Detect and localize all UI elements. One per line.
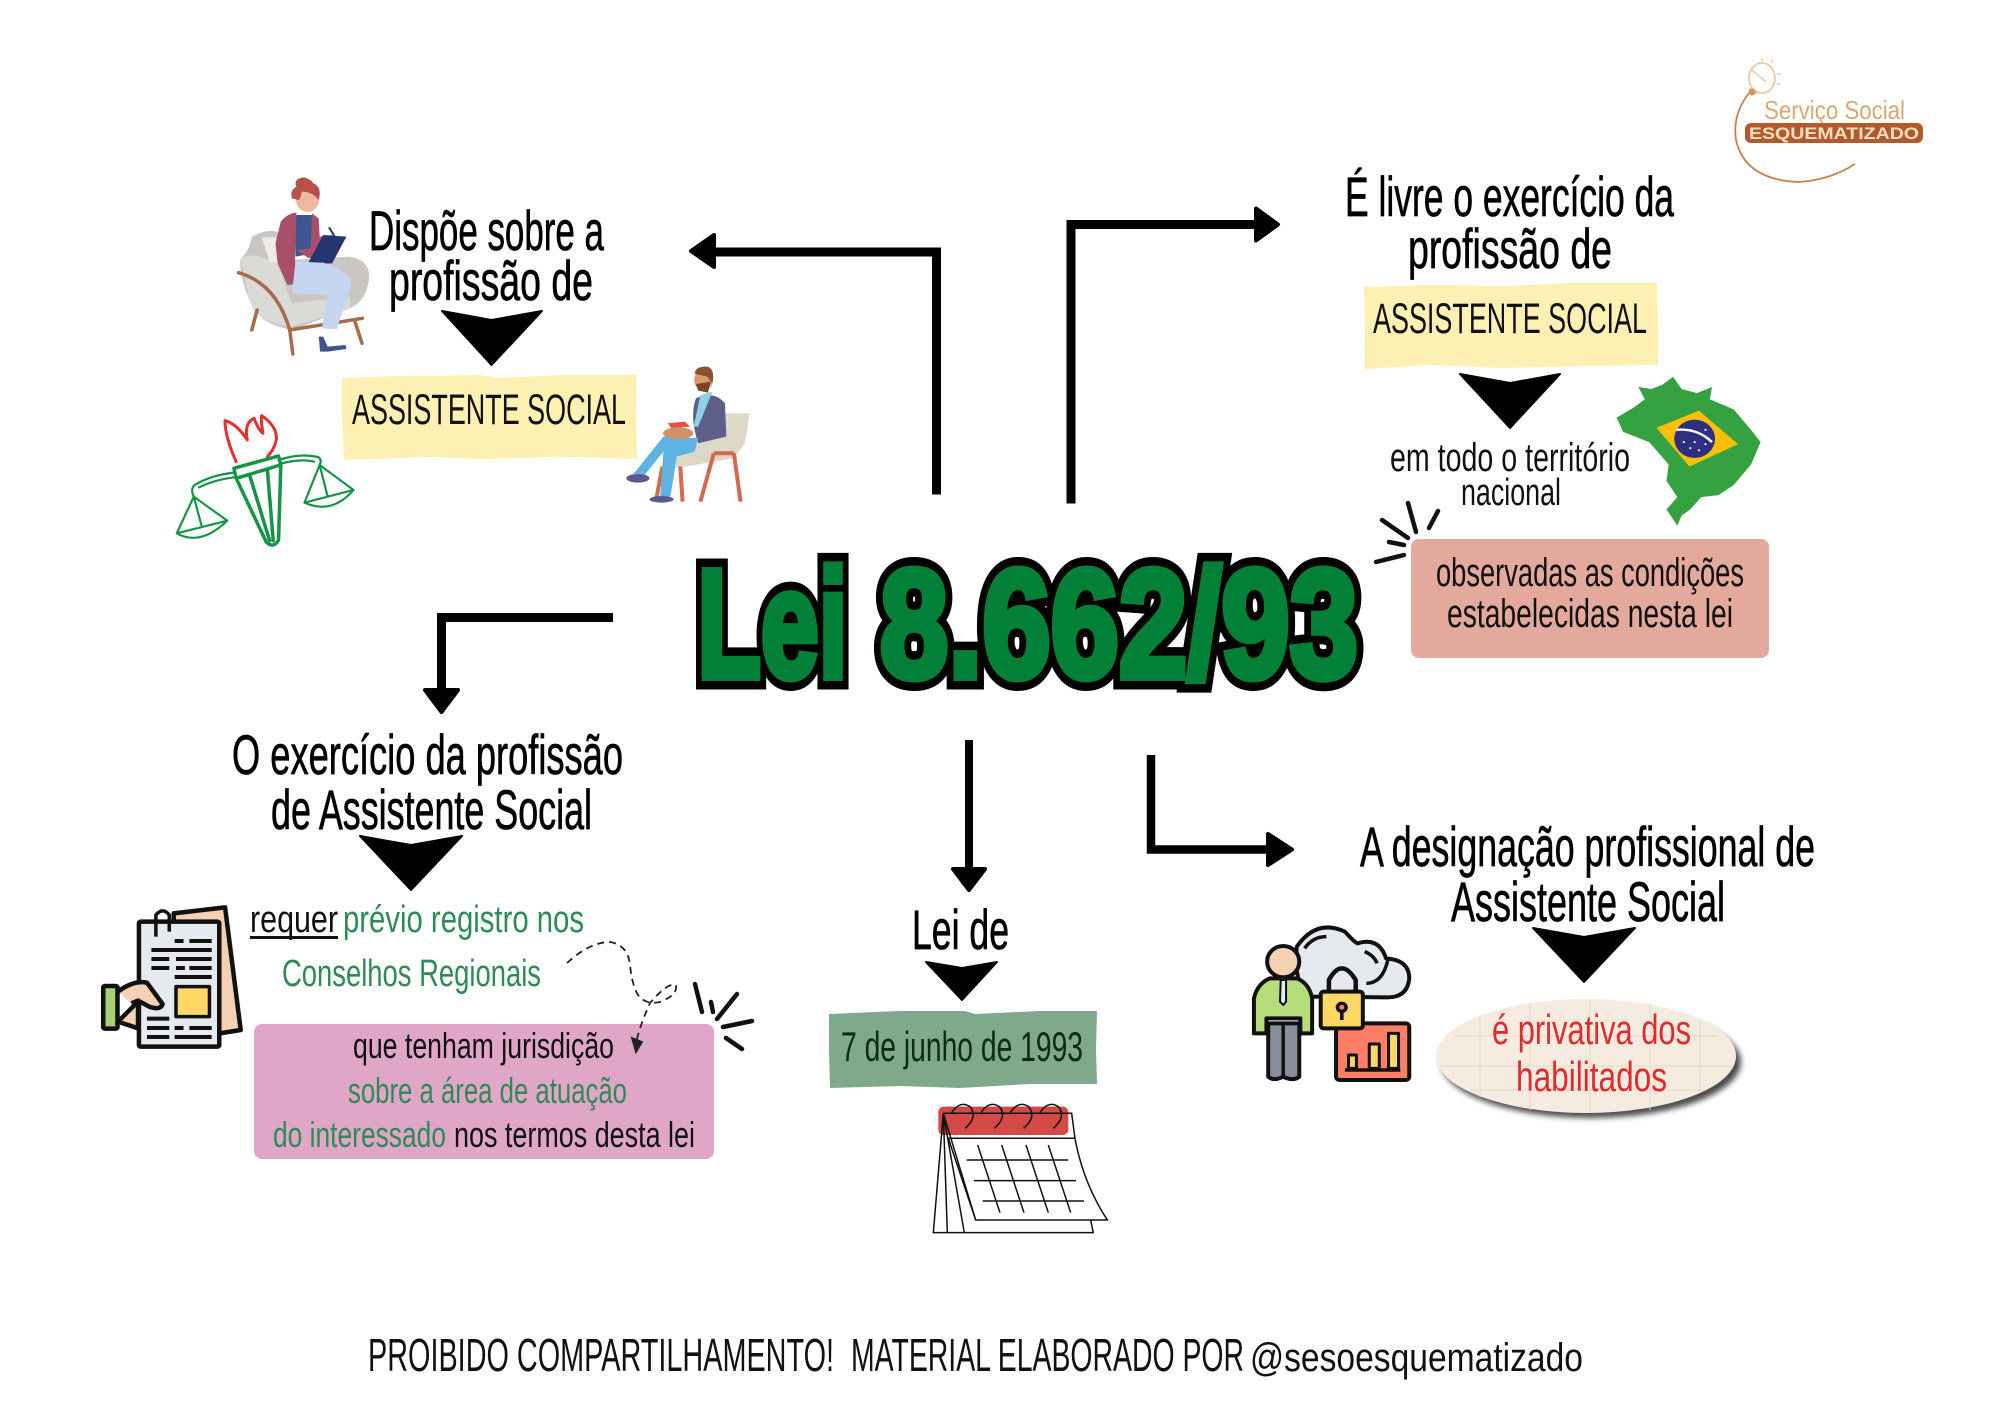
label box: ASSISTENTE SOCIAL: ASSISTENTE SOCIAL [352, 386, 626, 434]
callout: que tenham jurisdição: nos termos desta lei [454, 1114, 695, 1155]
title: Lei 8.662/93: Lei [698, 538, 848, 710]
arrow: dashed looping arrow [567, 942, 676, 1052]
icon: torch and scales of justice [177, 416, 354, 545]
callout: observadas as condições: estabelecidas nesta lei [1447, 592, 1733, 636]
title: Lei 8.662/93 [698, 538, 1358, 710]
arrow: down triangle [1533, 928, 1635, 982]
arrow: down triangle [926, 962, 997, 1000]
callout: é privativa dos habilitados: é privativa dos [1492, 1006, 1691, 1053]
callout: que tenham jurisdição: sobre a área de atuação [348, 1070, 627, 1111]
logo: Serviço Social Esquematizado [1735, 58, 1923, 182]
text: em todo o território nacional: em todo o território [1390, 436, 1630, 480]
icon: emphasis sparks [1376, 503, 1438, 562]
arrow: down triangle [442, 311, 542, 365]
icon: seated man with clipboard [626, 367, 750, 503]
arrow: to bottom-left panel [425, 618, 613, 712]
logo: Serviço Social Esquematizado: ESQUEMATIZADO [1749, 124, 1919, 143]
heading: O exercício da profissão de Assistente Social: de Assistente Social [271, 778, 592, 841]
text: requer prévio registro nos Conselhos Regionais: requer [250, 899, 338, 941]
label box: 7 de junho de 1993 [829, 1011, 1097, 1088]
callout: que tenham jurisdição: do interessado [273, 1114, 446, 1155]
text: requer prévio registro nos Conselhos Regionais [250, 899, 584, 995]
icon: emphasis sparks [695, 984, 752, 1049]
callout: observadas as condições [1411, 539, 1769, 658]
panel: a designação profissional [1254, 815, 1815, 1118]
heading: O exercício da profissão de Assistente Social [232, 723, 623, 841]
icon: person, cloud, lock and chart [1254, 927, 1409, 1080]
callout: é privativa dos habilitados: habilitados [1516, 1053, 1667, 1100]
icon: woman on armchair [238, 177, 369, 354]
callout: é privativa dos habilitados [1436, 999, 1741, 1118]
footer: PROIBIDO COMPARTILHAMENTO! [368, 1329, 834, 1381]
footer [368, 1329, 1583, 1381]
panel: é livre o exercício [1345, 165, 1769, 658]
callout: que tenham jurisdição [254, 1024, 714, 1159]
icon: map of Brazil with flag [1617, 377, 1761, 526]
heading: Lei de: Lei de [912, 898, 1009, 961]
heading: É livre o exercício da profissão de: É livre o exercício da [1345, 165, 1675, 228]
heading: O exercício da profissão de Assistente Social: O exercício da profissão [232, 723, 623, 786]
arrow: to centre-bottom panel [953, 740, 985, 890]
callout: observadas as condições: observadas as condições [1436, 551, 1744, 595]
arrow: to top-right panel [1071, 208, 1278, 504]
title: Lei 8.662/93: 8.662/93 [880, 538, 1358, 710]
arrow: to top-left panel [691, 235, 936, 494]
text: em todo o território nacional: nacional [1461, 472, 1561, 514]
panel: lei de 7 de junho de 1993 [829, 898, 1107, 1233]
heading: A designação profissional de Assistente Social: Assistente Social [1451, 870, 1725, 933]
arrow: to bottom-right panel [1151, 755, 1292, 865]
heading: Dispõe sobre a profissão de [369, 199, 605, 312]
callout: que tenham jurisdição: que tenham jurisdição [353, 1025, 614, 1066]
text: em todo o território nacional [1390, 436, 1630, 514]
label box: ASSISTENTE SOCIAL: ASSISTENTE SOCIAL [1373, 295, 1647, 343]
text: requer prévio registro nos Conselhos Regionais: prévio registro nos [343, 899, 584, 941]
title: Lei 8.662/93: Lei [698, 538, 848, 710]
panel: o exercício da profissão [103, 723, 752, 1159]
title: Lei 8.662/93: 8.662/93 [880, 538, 1358, 710]
logo: Serviço Social Esquematizado: Serviço Social [1764, 95, 1905, 125]
heading: A designação profissional de Assistente Social [1360, 815, 1815, 933]
label box: ASSISTENTE SOCIAL [342, 375, 637, 460]
text: requer prévio registro nos Conselhos Regionais: Conselhos Regionais [282, 953, 541, 995]
heading: É livre o exercício da profissão de: profissão de [1408, 217, 1612, 280]
heading: Dispõe sobre a profissão de: Dispõe sobre a [369, 199, 605, 262]
label box: ASSISTENTE SOCIAL [1364, 283, 1658, 369]
panel: dispõe sobre a profissão [177, 177, 750, 545]
heading: Dispõe sobre a profissão de: profissão de [389, 249, 593, 312]
heading: É livre o exercício da profissão de [1345, 165, 1675, 280]
arrow: down triangle [1460, 374, 1560, 428]
icon: hand holding document [103, 907, 241, 1047]
footer: MATERIAL ELABORADO POR [851, 1329, 1244, 1381]
arrow: down triangle [360, 836, 462, 890]
footer: @sesoesquematizado [1250, 1336, 1583, 1380]
icon: calendar [933, 1104, 1107, 1233]
label box: 7 de junho de 1993: 7 de junho de 1993 [841, 1023, 1083, 1070]
